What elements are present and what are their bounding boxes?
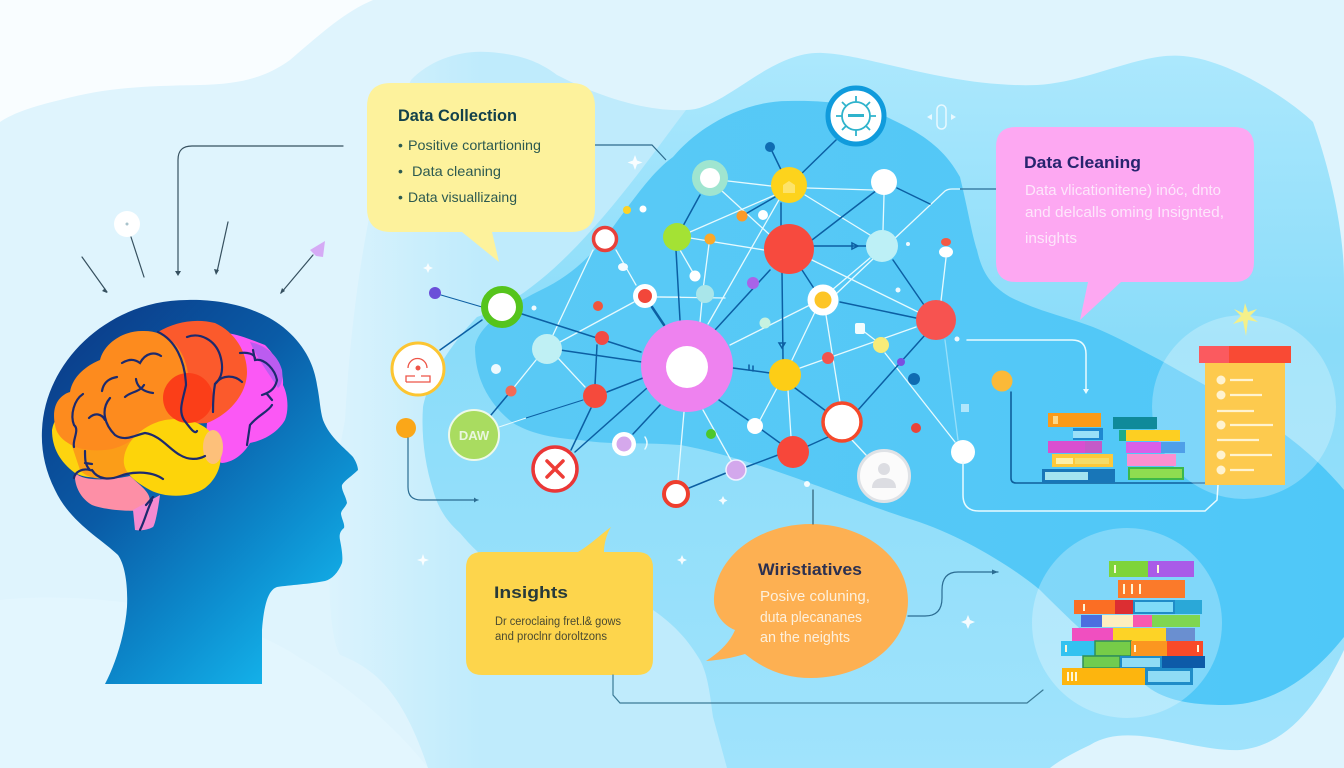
connectors: [408, 340, 1218, 703]
node: white tiny: [640, 206, 646, 212]
node: red ring upper: [594, 228, 616, 250]
brain: red lobe: [158, 321, 247, 425]
node: red tiny: [911, 423, 921, 433]
connector: insights to books: [613, 675, 1043, 703]
arrow 2: [131, 237, 144, 277]
node: white small left: [690, 270, 700, 282]
body text: duta plecananes: [760, 610, 862, 626]
callout: wiristiatives: [706, 524, 908, 678]
node: lilac ring: [612, 432, 636, 456]
brain: magenta lobe: [207, 333, 287, 463]
icon: yellow ring alarm: [392, 343, 444, 395]
brain: left yellow lobe: [52, 412, 125, 477]
sparkles: [417, 155, 975, 629]
body text: Data vlicationitene) inóc, dnto: [1025, 183, 1221, 199]
node: red medium: [583, 384, 607, 408]
icon: red X node: [533, 447, 577, 491]
connector: white node to list: [963, 462, 1218, 511]
edge: DAW light segment: [499, 418, 526, 427]
document list icon: [1199, 346, 1291, 485]
connector: orange dot to arrow: [408, 438, 478, 500]
arrow 3: long connector: [178, 146, 343, 274]
body text: [495, 616, 621, 643]
icon: DAW node: DAW: [459, 428, 490, 443]
heading: insights: Insights: [494, 583, 568, 602]
network edges: light: [511, 181, 996, 480]
node: red small center: [822, 352, 834, 364]
node: yellow tiny: [623, 206, 631, 214]
body text: [760, 589, 870, 646]
network nodes: [392, 88, 975, 506]
node: red white pair: [939, 238, 953, 258]
brain: purple lobe: [250, 342, 282, 388]
connector: data collection to network: [595, 145, 666, 160]
brain: [52, 321, 287, 530]
bubble: list background: [1152, 315, 1336, 499]
node: dark blue small: [908, 373, 920, 385]
node: green tiny: [706, 429, 716, 439]
connector: white arrow to books: [967, 340, 1086, 392]
icon: white dot above head: [114, 211, 140, 237]
bubble: books background: [1032, 528, 1222, 718]
brain: stem: [133, 495, 160, 530]
node: pale cyan left: [532, 334, 562, 364]
callout: data cleaning: [996, 127, 1254, 320]
brain: peach overlap: [203, 430, 223, 464]
node: pale yellow: [873, 337, 889, 353]
node: red lower: [777, 436, 809, 468]
brain: dark red overlap: [163, 373, 213, 423]
brain: yellow lobe: [124, 419, 221, 496]
node: yellow lower: [769, 359, 801, 391]
heading: data cleaning: Data Cleaning: [1024, 153, 1141, 172]
body text: Posive coluning,: [760, 589, 870, 605]
icon: top gear node: [828, 88, 884, 144]
connector: data cleaning short: [960, 188, 996, 190]
icon: lilac arrowhead: [310, 241, 325, 257]
icon: person node: [858, 450, 910, 502]
node: purple: [747, 277, 759, 289]
node: mint small: [760, 318, 770, 328]
arrow 5: [281, 255, 313, 293]
brain: pink lower lobe: [75, 473, 150, 511]
book stack: lower right: [1061, 561, 1205, 685]
icon: DAW node: [449, 410, 499, 460]
node: white small: [758, 210, 768, 220]
node: orange small 2: [704, 234, 716, 244]
book stack: middle: [1113, 417, 1185, 480]
bullet list: •: [398, 189, 403, 205]
node: white square: [855, 323, 865, 334]
node: mint ring: [692, 160, 728, 196]
callout: data collection: [367, 83, 595, 262]
node: red mid: [595, 331, 609, 345]
heading: wiristiatives: Wiristiatives: [758, 560, 862, 579]
node: white with red core: [633, 284, 657, 308]
node: red ring bottom: [664, 482, 688, 506]
body text: and proclnr doroltzons: [495, 631, 607, 643]
node: white right: [951, 440, 975, 464]
icon: faint capsule: [927, 105, 956, 129]
node: red tiny upper: [593, 301, 603, 311]
connector: network to oval: [812, 490, 814, 524]
node: red right: [916, 300, 956, 340]
node: lime: [663, 223, 691, 251]
node: lilac: [726, 460, 746, 480]
bullet list: Positive cortartioning: [408, 137, 541, 153]
node: red small left: [506, 386, 516, 396]
body text: and delcalls oming Insignted,: [1025, 205, 1224, 221]
network edges: dark: [440, 140, 930, 488]
node: white ring yellow core: [808, 284, 838, 316]
arrows pointing at the head: [82, 146, 343, 294]
brain: folds: [72, 332, 277, 530]
arrow 1: [82, 257, 107, 292]
bullet list: •: [398, 163, 403, 179]
node: amber dot: [992, 370, 1012, 392]
node: leaf: [618, 263, 628, 271]
head silhouette: [42, 300, 358, 684]
bullet list: •: [398, 137, 403, 153]
node: orange left: [396, 418, 416, 438]
connector: orange dot to book shelf: [1011, 392, 1205, 483]
node: red ring: [823, 403, 861, 441]
node: white: [871, 169, 897, 195]
bullet list: Data cleaning: [412, 163, 501, 179]
node: green ring: [484, 290, 520, 324]
node: white lower: [747, 418, 763, 434]
node: central pink hub: [641, 320, 733, 412]
icon: yellow star: [1233, 303, 1258, 336]
book stack: left: [1042, 413, 1115, 483]
node: purple left: [429, 287, 441, 299]
node: orange small: [736, 210, 748, 222]
node: small dark blue: [765, 142, 775, 152]
brain: orange lobe: [54, 331, 189, 450]
node: yellow: [771, 167, 807, 203]
bullet list: [398, 137, 541, 205]
bullet list: Data visuallizaing: [408, 189, 517, 205]
body text: [1025, 183, 1224, 247]
callout: insights: [466, 527, 653, 675]
body text: insights: [1025, 231, 1077, 247]
node: purple tiny: [897, 358, 905, 366]
connector: oval to arrow: [908, 572, 998, 616]
heading: data collection: Data Collection: [398, 107, 517, 125]
node: red large: [764, 224, 814, 274]
body text: Dr ceroclaing fret.l& gows: [495, 616, 621, 628]
brain: orange lower band: [72, 425, 135, 478]
arrow 4: [217, 222, 228, 272]
node: pale cyan small: [696, 285, 714, 303]
node: pale cyan: [866, 230, 898, 262]
body text: an the neights: [760, 630, 850, 646]
